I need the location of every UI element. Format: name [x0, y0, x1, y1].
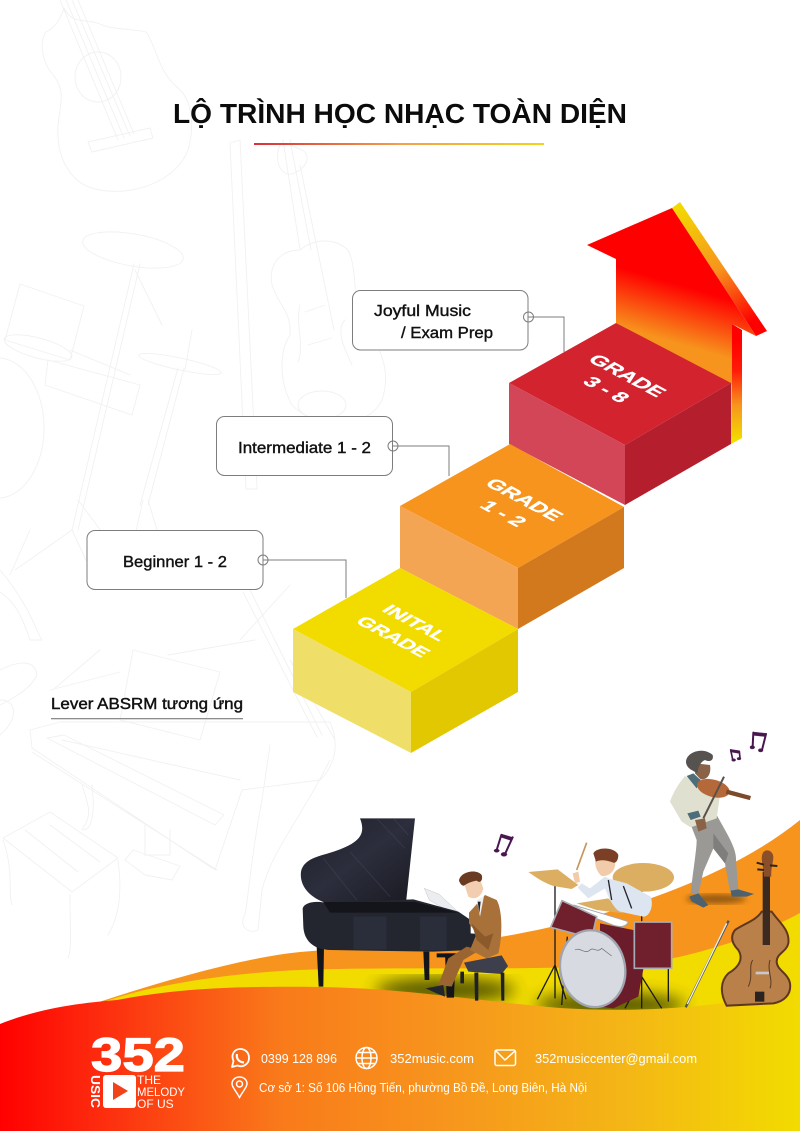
title underline [254, 143, 544, 145]
icon: violinist [670, 751, 754, 908]
website: 352music.com [390, 1051, 474, 1066]
logo: 352 music: MELODY [137, 1085, 185, 1099]
email: 352musiccenter@gmail.com [535, 1051, 697, 1066]
callout: Beginner 1 - 2 [87, 530, 346, 598]
arrow behind the steps [587, 202, 767, 444]
note: Lever ABSRM: Lever ABSRM tương ứng [51, 696, 243, 713]
callout: Intermediate 1 - 2 [216, 416, 449, 476]
line art: violin and bow [230, 140, 386, 489]
logo: 352 music [88, 1028, 185, 1111]
icon: phone [232, 1049, 249, 1067]
stage waves [99, 820, 800, 1010]
background line art of instruments [0, 0, 386, 958]
logo: 352 music: OF US [137, 1097, 174, 1111]
icon: music note by the pianist [494, 834, 513, 856]
step block: grade 1-2 [400, 444, 624, 629]
label: initial grade [351, 602, 452, 660]
icon: grand piano [301, 818, 490, 998]
line art: acoustic guitar [42, 0, 192, 191]
callout: Intermediate 1 - 2: Intermediate 1 - 2 [238, 440, 371, 457]
line art: grand piano [3, 585, 335, 958]
yellow wave [100, 913, 800, 1030]
label: initial grade: INITAL [377, 602, 452, 644]
title: LỘ TRÌNH HỌC NHẠC TOÀN DIỆN [173, 97, 627, 129]
violinist shadow [686, 894, 746, 904]
icon: music notes by the violinist [731, 732, 766, 761]
icon: globe [356, 1048, 377, 1068]
label: grade 1-2: 1 - 2 [475, 498, 531, 530]
phone number: 0399 128 896 [261, 1051, 337, 1066]
footer band [0, 987, 800, 1131]
address: Cơ sở 1: Số 106 Hồng Tiến, phường Bồ Đề, Long Biên, Hà Nội [259, 1080, 587, 1095]
icon: mail [495, 1050, 516, 1066]
logo: 352 music: 352 [91, 1028, 185, 1081]
icon: location pin [232, 1077, 247, 1098]
callout: Joyful Music / Exam Prep: / Exam Prep [401, 325, 493, 342]
step block: initial grade [293, 568, 518, 753]
callout: Joyful Music / Exam Prep [352, 290, 564, 352]
orange wave [90, 820, 800, 1030]
step block: grade 3-8 [509, 202, 767, 505]
line art: drum kit [0, 225, 222, 735]
floor shadows [375, 978, 685, 1017]
callout: Joyful Music / Exam Prep: Joyful Music [374, 303, 471, 320]
label: grade 3-8: 3 - 8 [578, 374, 634, 406]
icon: double bass and bow [686, 850, 790, 1007]
icon: drum kit and drummer [528, 843, 674, 1013]
icon: pianist [426, 871, 508, 1001]
label: initial grade: GRADE [351, 614, 435, 660]
logo: 352 music: THE [137, 1073, 161, 1087]
illustration: band of musicians [301, 732, 790, 1013]
callout: Beginner 1 - 2: Beginner 1 - 2 [123, 554, 227, 571]
label: grade 3-8: GRADE [583, 352, 670, 400]
label: grade 1-2: GRADE [480, 476, 567, 524]
logo: 352 music: USIC [88, 1075, 103, 1109]
